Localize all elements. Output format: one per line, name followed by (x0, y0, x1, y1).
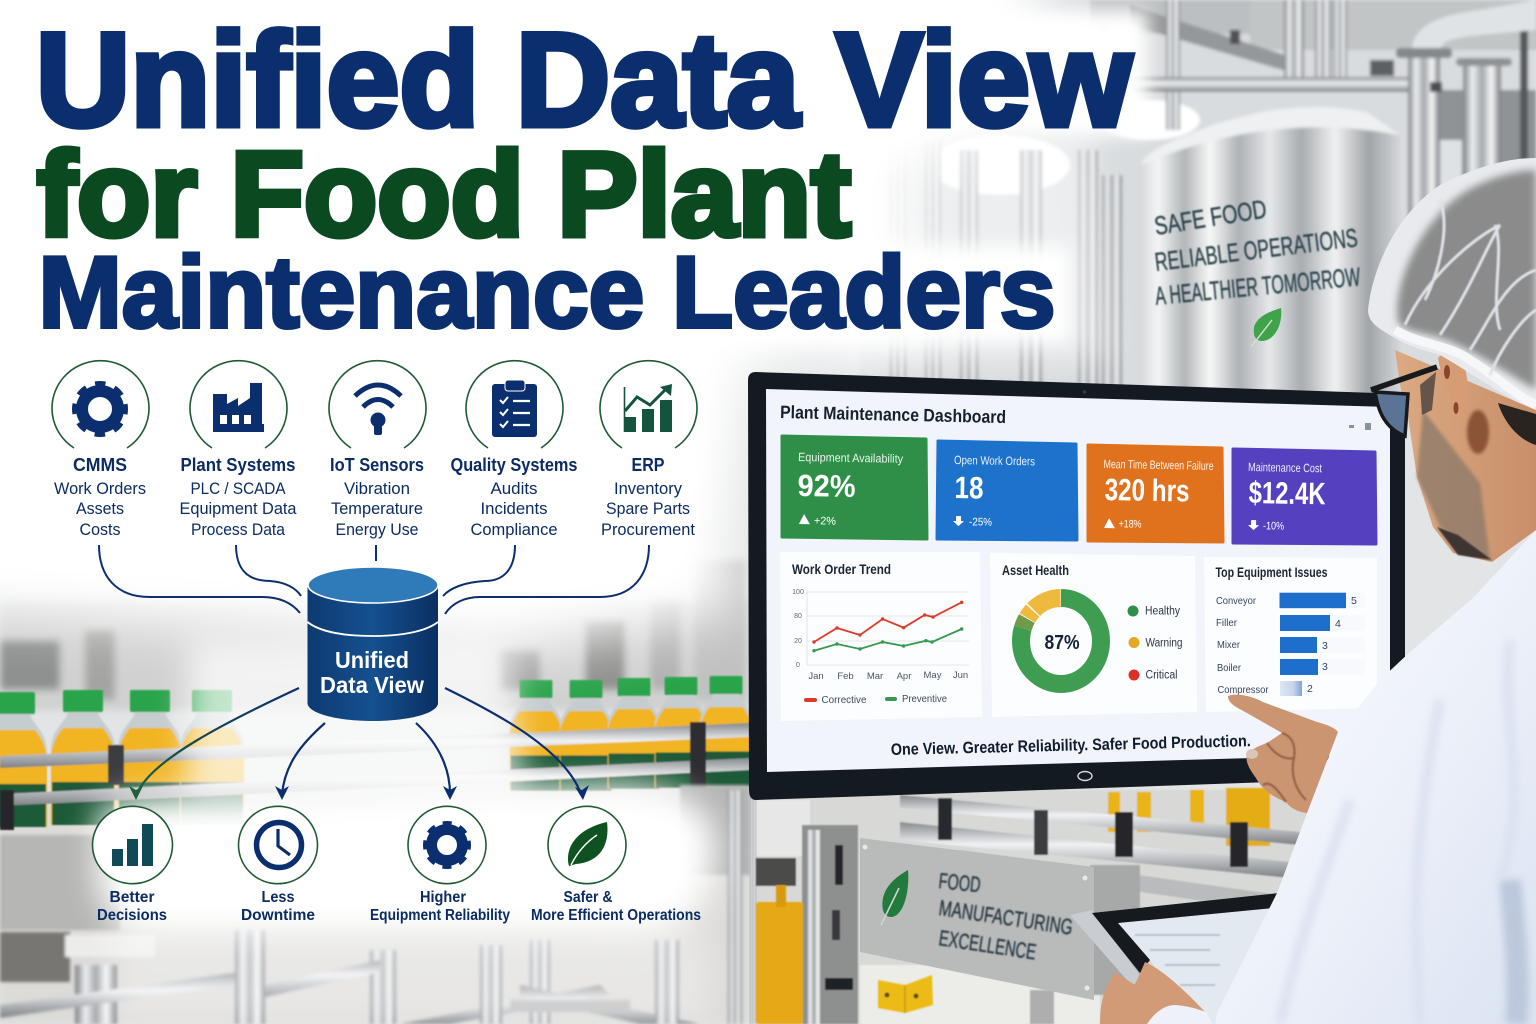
database: Unified Data View: Data View (320, 672, 424, 698)
glasses (1371, 367, 1437, 436)
line chart: 0 (796, 662, 800, 669)
outcome: better decisions (92, 806, 172, 924)
chart legend: Preventive (902, 693, 947, 705)
source: Quality Systems: Audits (490, 479, 538, 498)
tank lettering: RELIABLE OPERATIONS (1153, 222, 1359, 277)
icon: gear (52, 361, 149, 448)
line chart: 100 (792, 589, 804, 596)
arrow to less downtime (275, 723, 325, 800)
KPI card: maintenance cost: $12.4K (1248, 475, 1326, 511)
bar chart: Conveyor (1216, 595, 1256, 607)
hairnet (1368, 158, 1536, 410)
KPI card: maintenance cost: -10% (1263, 520, 1284, 533)
panel: asset health (990, 553, 1197, 717)
database: Unified Data View: Unified (335, 647, 409, 673)
bar chart: 3 (1322, 661, 1328, 673)
KPI card: equipment availability: 92% (797, 468, 856, 504)
tank lettering: A HEALTHIER TOMORROW (1154, 261, 1362, 311)
line chart: May (924, 670, 942, 681)
KPI card: open work orders: -25% (969, 516, 992, 529)
person: technician (1100, 158, 1536, 1024)
sign lettering: EXCELLENCE (937, 925, 1038, 965)
arrows: data view to outcomes (129, 688, 589, 800)
arrow to safer operations (445, 688, 589, 800)
neck and face (1395, 350, 1536, 562)
donut legend: Critical (1146, 670, 1178, 682)
KPI card: mean time between failure: 320 hrs (1104, 472, 1190, 509)
panel: work order trend: Work Order Trend (792, 562, 891, 577)
source: Plant Systems: Plant Systems (180, 455, 296, 475)
source: IoT Sensors: IoT Sensors (330, 455, 424, 475)
tablet hand and cuff (1100, 962, 1213, 1024)
scenery: conveyor frame, valve and legs lower left (0, 785, 750, 1024)
icon: bar chart (92, 806, 172, 884)
KPI card: open work orders: Open Work Orders (954, 453, 1035, 468)
source: ERP: Inventory (614, 479, 682, 498)
title (36, 6, 1132, 349)
bar chart: Mixer (1217, 639, 1240, 651)
sign lettering: MANUFACTURING (937, 895, 1074, 940)
source: CMMS: Costs (80, 520, 120, 539)
panel: work order trend (780, 552, 982, 721)
scenery: bottles on conveyor (0, 676, 752, 830)
source: CMMS: Work Orders (54, 479, 146, 498)
KPI card: mean time between failure: Mean Time Between Failure (1103, 457, 1214, 473)
panel: data sources (52, 361, 697, 539)
arrow to better decisions (129, 688, 299, 800)
icon: gear (408, 806, 486, 884)
scenery: upper-right process piping and tank (860, 0, 1536, 400)
bar chart (1216, 593, 1365, 696)
KPI card: equipment availability: +2% (814, 515, 836, 528)
source: IoT Sensors: Temperature (331, 499, 423, 518)
icon: tank leaf (1251, 308, 1281, 347)
bar chart: 3 (1322, 640, 1328, 652)
source: IoT Sensors (329, 361, 426, 539)
scenery: conveyor rails and guard below monitor (750, 788, 1400, 1024)
dashboard screen (766, 389, 1390, 772)
tablet (1070, 893, 1279, 1024)
shirt (1215, 530, 1536, 1024)
panel: asset health: 87% (1044, 632, 1080, 654)
outcome: better decisions: Decisions (97, 907, 167, 924)
source: Plant Systems (180, 361, 297, 539)
outcome: less downtime (238, 806, 318, 924)
icon: sign leaf (881, 870, 908, 925)
sign lettering (937, 868, 1074, 965)
connectors: sources into data view (99, 545, 649, 614)
source: Plant Systems: Equipment Data (180, 499, 297, 518)
line chart (792, 589, 969, 682)
line chart: Apr (897, 671, 911, 682)
source: ERP: Procurement (601, 520, 695, 539)
bar chart: 5 (1351, 595, 1357, 607)
panel: top equipment issues: Top Equipment Issues (1216, 565, 1328, 580)
source: ERP: Spare Parts (606, 499, 690, 518)
panel: top equipment issues (1204, 557, 1377, 712)
source: CMMS: Assets (76, 499, 124, 518)
outcome: better decisions: Better (110, 889, 154, 906)
outcome: safer operations (531, 806, 701, 924)
source: IoT Sensors: Energy Use (336, 520, 418, 539)
icon: leaf (548, 806, 626, 884)
database: Unified Data View (308, 567, 438, 721)
outcome: safer operations: More Efficient Operations (531, 907, 701, 924)
source: CMMS: CMMS (73, 455, 127, 475)
icon: growth chart (600, 361, 697, 448)
webcam (1083, 390, 1086, 394)
icon: wireless sensor (329, 361, 426, 448)
outcome: less downtime: Downtime (241, 907, 315, 924)
source: ERP: ERP (632, 455, 664, 475)
panel: outcomes (92, 806, 701, 924)
bar chart: Compressor (1218, 684, 1269, 696)
line chart: Jun (953, 670, 968, 681)
icon: yellow connector block (878, 975, 933, 1013)
line chart: Feb (837, 671, 854, 682)
outcome: higher equipment reliability: Higher (420, 889, 466, 906)
sign lettering: FOOD (937, 868, 982, 897)
dashboard tagline: One View. Greater Reliability. Safer Food Production. (891, 732, 1251, 759)
window controls (1349, 423, 1371, 430)
source: IoT Sensors: Vibration (344, 479, 410, 498)
source: Quality Systems: Compliance (470, 520, 558, 539)
line chart: 80 (794, 613, 802, 620)
tank lettering (1152, 194, 1362, 311)
source: Plant Systems: PLC / SCADA (190, 479, 286, 498)
monitor (748, 372, 1405, 800)
scenery: hazy structures behind diagram (0, 560, 750, 1024)
dashboard title: Plant Maintenance Dashboard (780, 402, 1006, 427)
donut chart (1021, 598, 1101, 684)
outcome: higher equipment reliability: Equipment Reliability (370, 907, 510, 924)
source: CMMS (52, 361, 149, 539)
donut legend: Warning (1146, 638, 1182, 650)
donut legend: Healthy (1145, 606, 1180, 618)
icon: clock (238, 806, 318, 884)
white mist over the scene (0, 0, 1148, 1024)
line chart: Jan (808, 671, 824, 682)
KPI card: equipment availability: Equipment Availability (798, 450, 903, 466)
source: Quality Systems (450, 361, 578, 539)
icon: clipboard checklist (466, 361, 563, 448)
chart legend: Corrective (822, 694, 867, 706)
icon: yellow guard post (756, 885, 803, 1024)
tank lettering: SAFE FOOD (1152, 194, 1269, 241)
source: ERP (600, 361, 697, 539)
title line 3: Maintenance Leaders (38, 237, 1056, 349)
KPI card: maintenance cost (1233, 449, 1376, 544)
KPI card: equipment availability (782, 436, 927, 539)
source: Quality Systems: Quality Systems (450, 455, 578, 475)
title line 2: for Food Plant (37, 128, 851, 262)
bar chart: Filler (1216, 617, 1237, 629)
source: Quality Systems: Incidents (480, 499, 548, 518)
KPI card: maintenance cost: Maintenance Cost (1248, 460, 1323, 475)
source: Plant Systems: Process Data (191, 520, 285, 539)
monitor bezel (748, 372, 1405, 800)
outcome: less downtime: Less (262, 889, 295, 906)
KPI card: open work orders: 18 (954, 470, 984, 506)
donut legend (1128, 606, 1182, 682)
bar chart: 4 (1335, 618, 1341, 630)
line chart: 20 (794, 638, 802, 645)
outcome: safer operations: Safer & (564, 889, 613, 906)
chart legend (804, 693, 947, 706)
bar chart: Boiler (1217, 662, 1241, 674)
outcome: higher equipment reliability (370, 806, 510, 924)
arrow to higher reliability (416, 723, 457, 800)
icon: factory (190, 361, 287, 448)
line chart: Mar (867, 671, 883, 682)
KPI card: mean time between failure: +18% (1118, 518, 1142, 531)
bar chart: 2 (1307, 683, 1313, 695)
KPI card: mean time between failure (1088, 445, 1223, 542)
monitor logo (1078, 772, 1092, 780)
panel: food manufacturing excellence sign (860, 838, 1094, 1000)
KPI card: open work orders (937, 441, 1077, 540)
panel: asset health: Asset Health (1002, 563, 1069, 578)
title line 1: Unified Data View (36, 6, 1132, 154)
pointing hand (1228, 695, 1338, 813)
